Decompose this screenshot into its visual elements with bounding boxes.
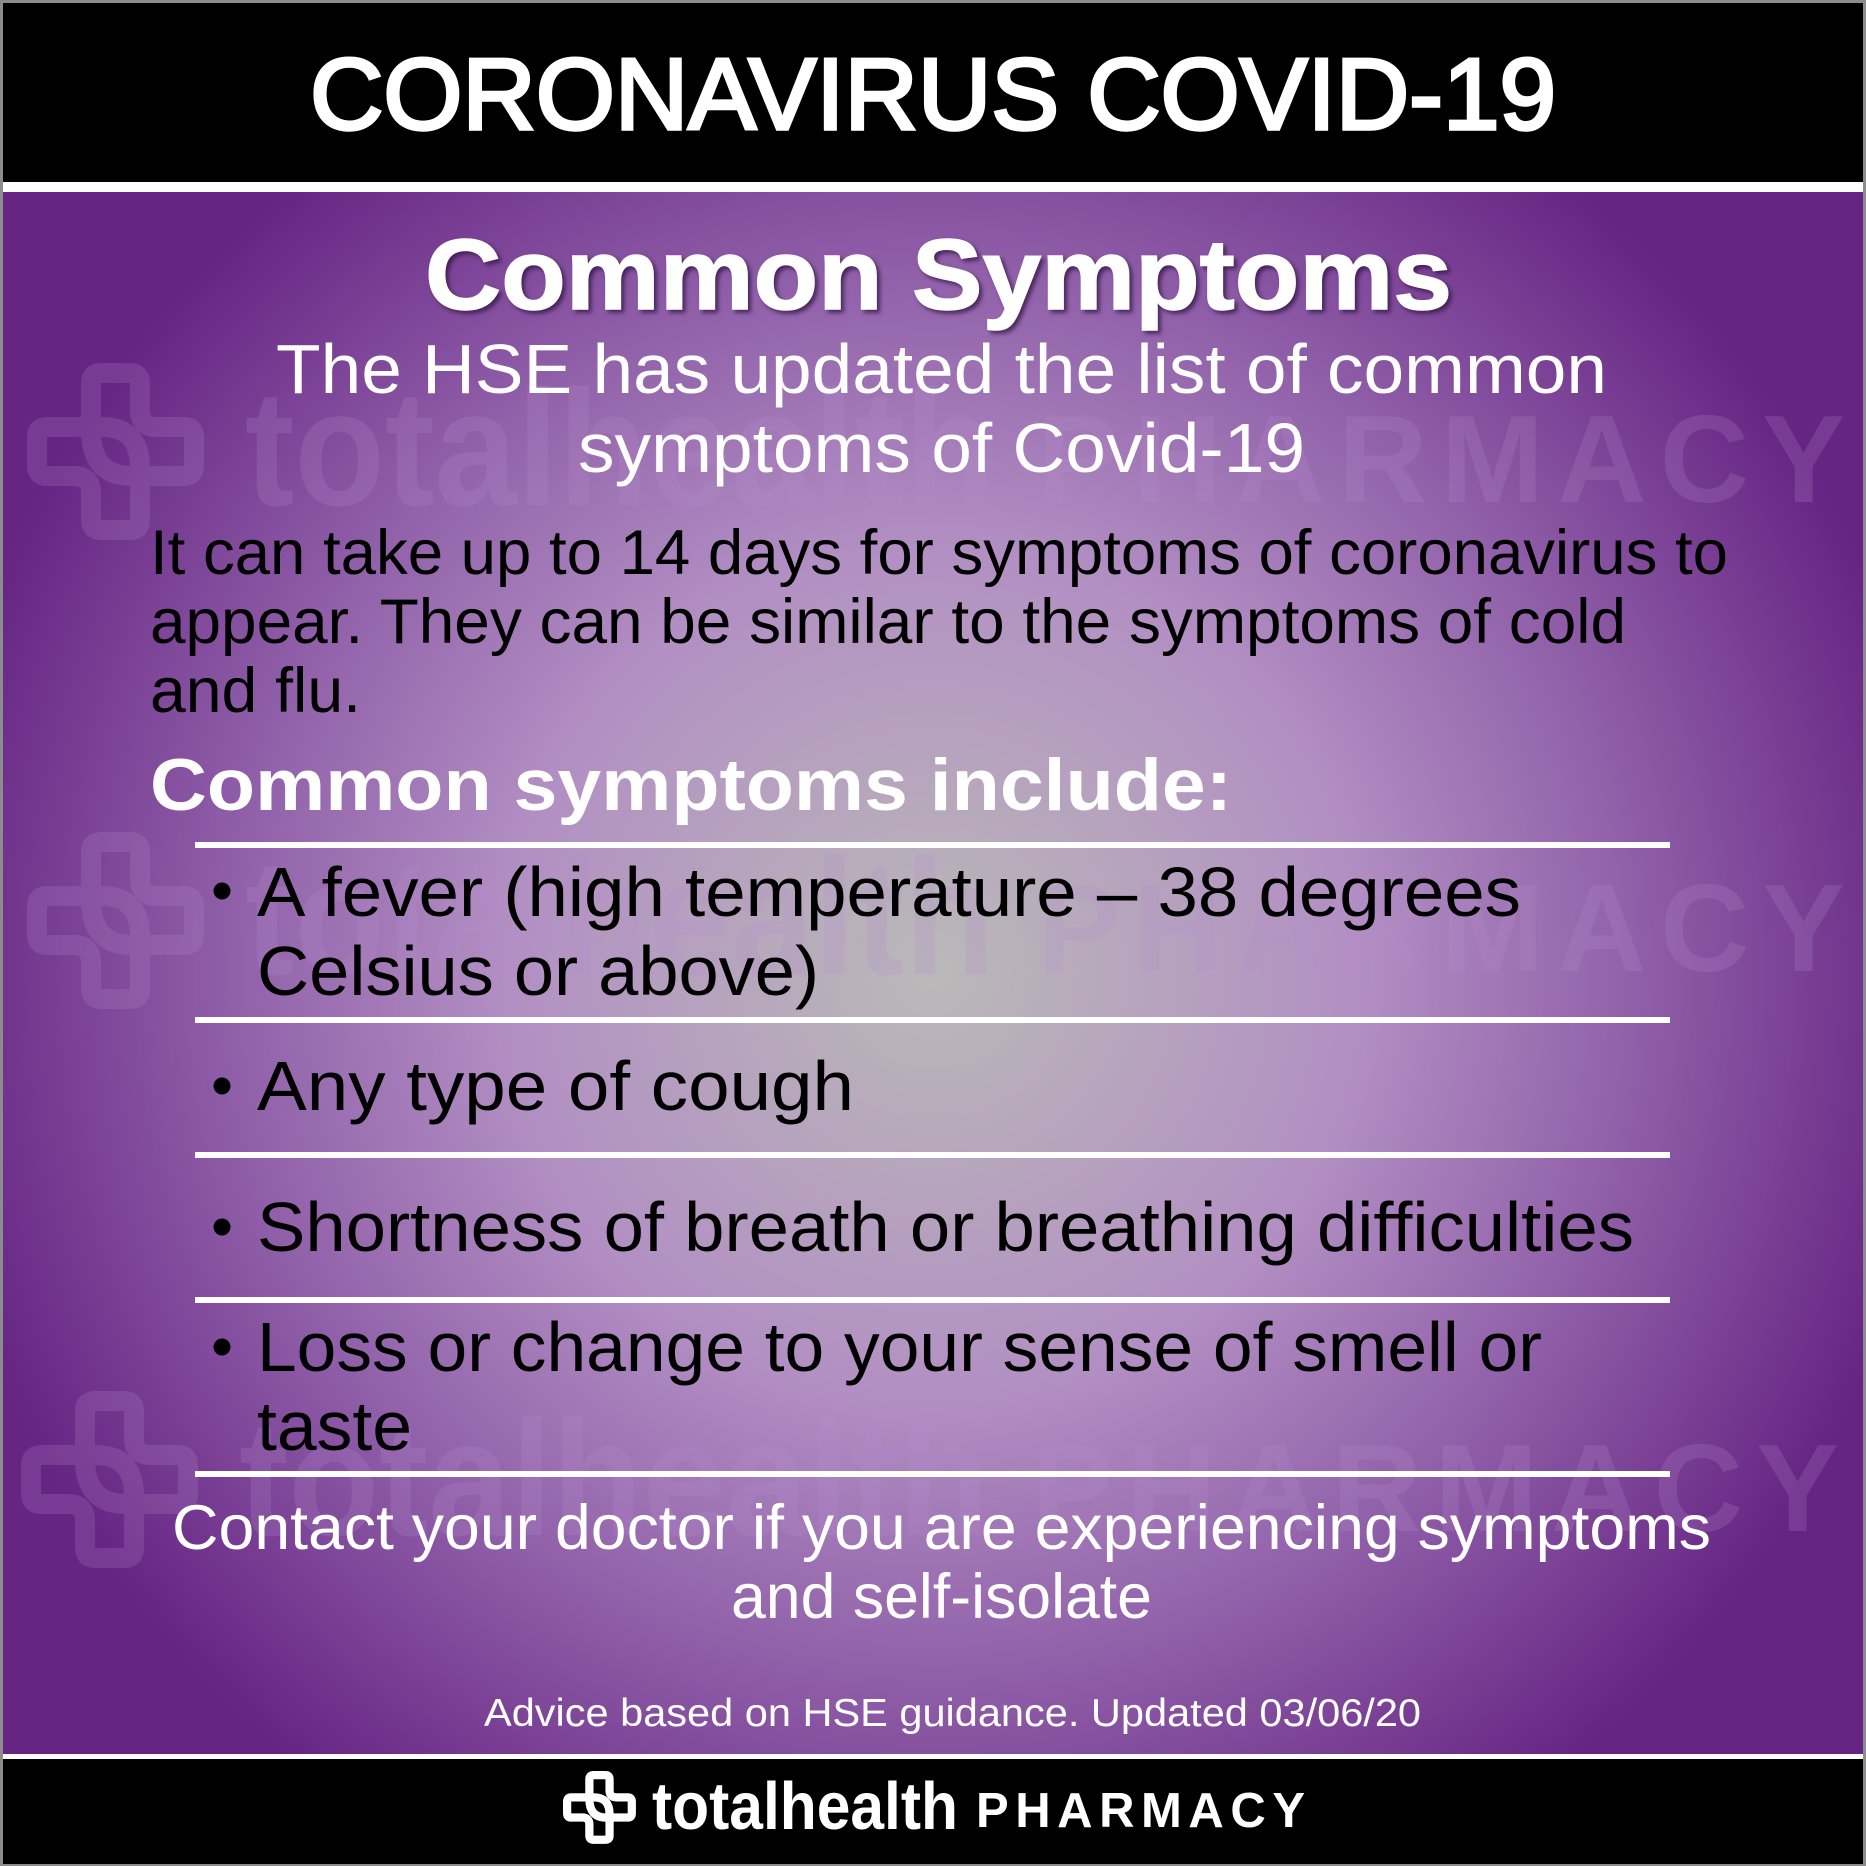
- symptom: fever: Celsius or above): [257, 932, 819, 1010]
- symptom: smell or taste: taste: [257, 1387, 412, 1465]
- watermark row 2: PHARMACY: [1037, 860, 1845, 998]
- symptom: cough: Any type of cough: [257, 1047, 854, 1125]
- title: CORONAVIRUS COVID-19: [310, 39, 1556, 151]
- intro paragraph: It can take up to 14 days for symptoms of coronavirus to: [150, 518, 1728, 588]
- intro paragraph: [150, 518, 1728, 726]
- watermark row 1: [37, 356, 1845, 540]
- intro paragraph: appear. They can be similar to the symptoms of cold: [150, 587, 1626, 657]
- footer logo: PHARMACY: [976, 1784, 1305, 1838]
- subheading: The HSE has updated the list of common: [276, 330, 1607, 408]
- intro paragraph: and flu.: [150, 656, 361, 726]
- footer logo: totalhealth: [652, 1769, 958, 1844]
- symptom: fever: [214, 853, 1521, 1010]
- symptom: smell or taste: [214, 1308, 1542, 1465]
- watermark row 1: PHARMACY: [1037, 391, 1845, 529]
- watermark row 3: [31, 1386, 1839, 1570]
- symptom list: [195, 842, 1670, 1477]
- symptom: breath: Shortness of breath or breathing difficulties: [257, 1188, 1634, 1266]
- watermark row 1: totalhealth: [245, 356, 995, 540]
- list heading: Common symptoms include:: [150, 745, 1232, 826]
- contact advice: Contact your doctor if you are experiencing symptoms: [172, 1493, 1711, 1563]
- heading: common symptoms: Common Symptoms: [425, 219, 1452, 331]
- symptom: fever: A fever (high temperature – 38 degrees: [257, 853, 1521, 931]
- contact advice: and self-isolate: [731, 1562, 1152, 1632]
- icon: cross: [567, 1775, 632, 1840]
- watermark row 2: totalhealth: [245, 825, 995, 1009]
- source note: Advice based on HSE guidance. Updated 03/06/20: [484, 1692, 1421, 1735]
- watermark row 2: [37, 825, 1845, 1009]
- contact advice: [172, 1493, 1711, 1632]
- header band: [3, 3, 1863, 192]
- footer band: [3, 1754, 1863, 1864]
- footer logo: [567, 1769, 1305, 1844]
- subheading: [276, 330, 1607, 487]
- watermark row 3: totalhealth: [239, 1386, 989, 1570]
- symptom: smell or taste: Loss or change to your sense of smell or: [257, 1308, 1542, 1386]
- watermark row 3: PHARMACY: [1031, 1420, 1839, 1558]
- subheading: symptoms of Covid-19: [578, 409, 1305, 487]
- watermark logos: [31, 356, 1845, 1570]
